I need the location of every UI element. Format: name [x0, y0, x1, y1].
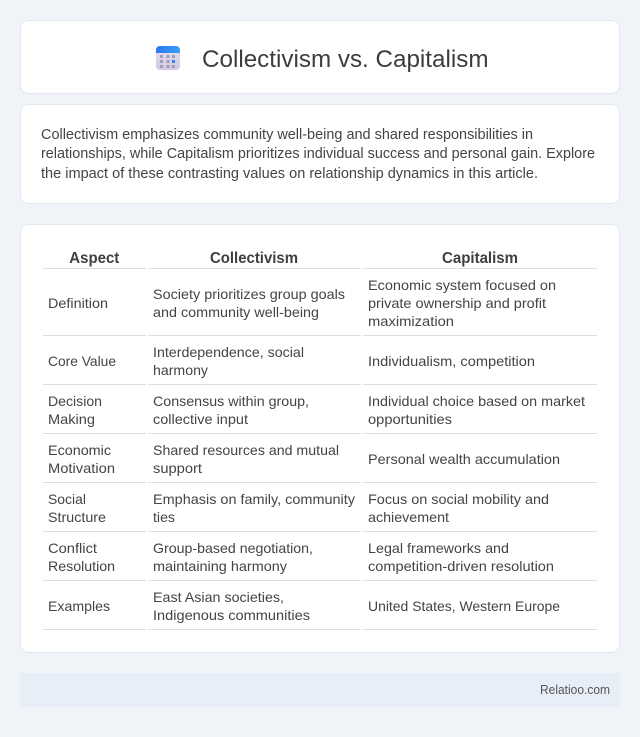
panel: title card	[20, 20, 620, 94]
table header: Aspect	[69, 250, 119, 267]
row: examples	[48, 589, 560, 623]
row: core value: Interdependence, social	[153, 344, 304, 360]
row: decision making: Individual choice based on market	[368, 393, 585, 409]
icon: calendar	[156, 46, 180, 70]
row: definition: private ownership and profit	[368, 295, 546, 311]
row: examples: East Asian societies,	[153, 589, 284, 605]
row: conflict resolution: Group-based negotiation,	[153, 540, 313, 556]
row: social structure	[48, 491, 549, 525]
footer	[20, 673, 620, 707]
intro text: the impact of these contrasting values on relationship dynamics in this article.	[41, 166, 538, 182]
row: conflict resolution: maintaining harmony	[153, 558, 287, 574]
row: economic motivation	[48, 442, 560, 476]
table header: Capitalism	[442, 250, 518, 267]
row: social structure: Social	[48, 491, 86, 507]
title: Collectivism vs. Capitalism	[202, 46, 488, 73]
row: core value: harmony	[153, 362, 208, 378]
row: social structure: ties	[153, 509, 175, 525]
table header	[69, 250, 518, 267]
row: economic motivation: Economic	[48, 442, 111, 458]
panel: introduction	[20, 104, 620, 204]
row: social structure: Structure	[48, 509, 106, 525]
row: economic motivation: Motivation	[48, 460, 115, 476]
row: core value: Individualism, competition	[368, 353, 535, 369]
row: examples: Indigenous communities	[153, 607, 310, 623]
intro text: relationships, while Capitalism prioritizes individual success and personal gain. Explore	[41, 146, 595, 162]
table rules	[43, 268, 597, 630]
row: conflict resolution: Conflict	[48, 540, 97, 556]
row: social structure: Emphasis on family, community	[153, 491, 355, 507]
row: decision making: Consensus within group,	[153, 393, 309, 409]
intro text: Collectivism emphasizes community well-being and shared responsibilities in	[41, 127, 533, 143]
row: decision making: Making	[48, 411, 95, 427]
row: economic motivation: Personal wealth accumulation	[368, 451, 560, 467]
row: conflict resolution	[48, 540, 554, 574]
row: decision making: opportunities	[368, 411, 452, 427]
row: decision making	[48, 393, 585, 427]
table header: Collectivism	[210, 250, 298, 267]
row: social structure: Focus on social mobility and	[368, 491, 549, 507]
row: social structure: achievement	[368, 509, 449, 525]
row: definition: Economic system focused on	[368, 277, 556, 293]
row: examples: United States, Western Europe	[368, 598, 560, 614]
row: examples: Examples	[48, 598, 110, 614]
footer credit: Relatioo.com	[540, 683, 610, 697]
row: conflict resolution: Resolution	[48, 558, 115, 574]
row: definition: Society prioritizes group goals	[153, 286, 345, 302]
row: core value	[48, 344, 535, 378]
row: decision making: collective input	[153, 411, 248, 427]
row: definition: maximization	[368, 313, 454, 329]
row: definition: and community well-being	[153, 304, 319, 320]
row: definition: Definition	[48, 295, 108, 311]
row: conflict resolution: Legal frameworks and	[368, 540, 509, 556]
intro text	[41, 127, 595, 182]
row: conflict resolution: competition-driven resolution	[368, 558, 554, 574]
row: decision making: Decision	[48, 393, 102, 409]
row: economic motivation: support	[153, 460, 202, 476]
row: economic motivation: Shared resources and mutual	[153, 442, 339, 458]
row: core value: Core Value	[48, 353, 116, 369]
row: definition	[48, 277, 556, 329]
panel: comparison table	[20, 224, 620, 652]
